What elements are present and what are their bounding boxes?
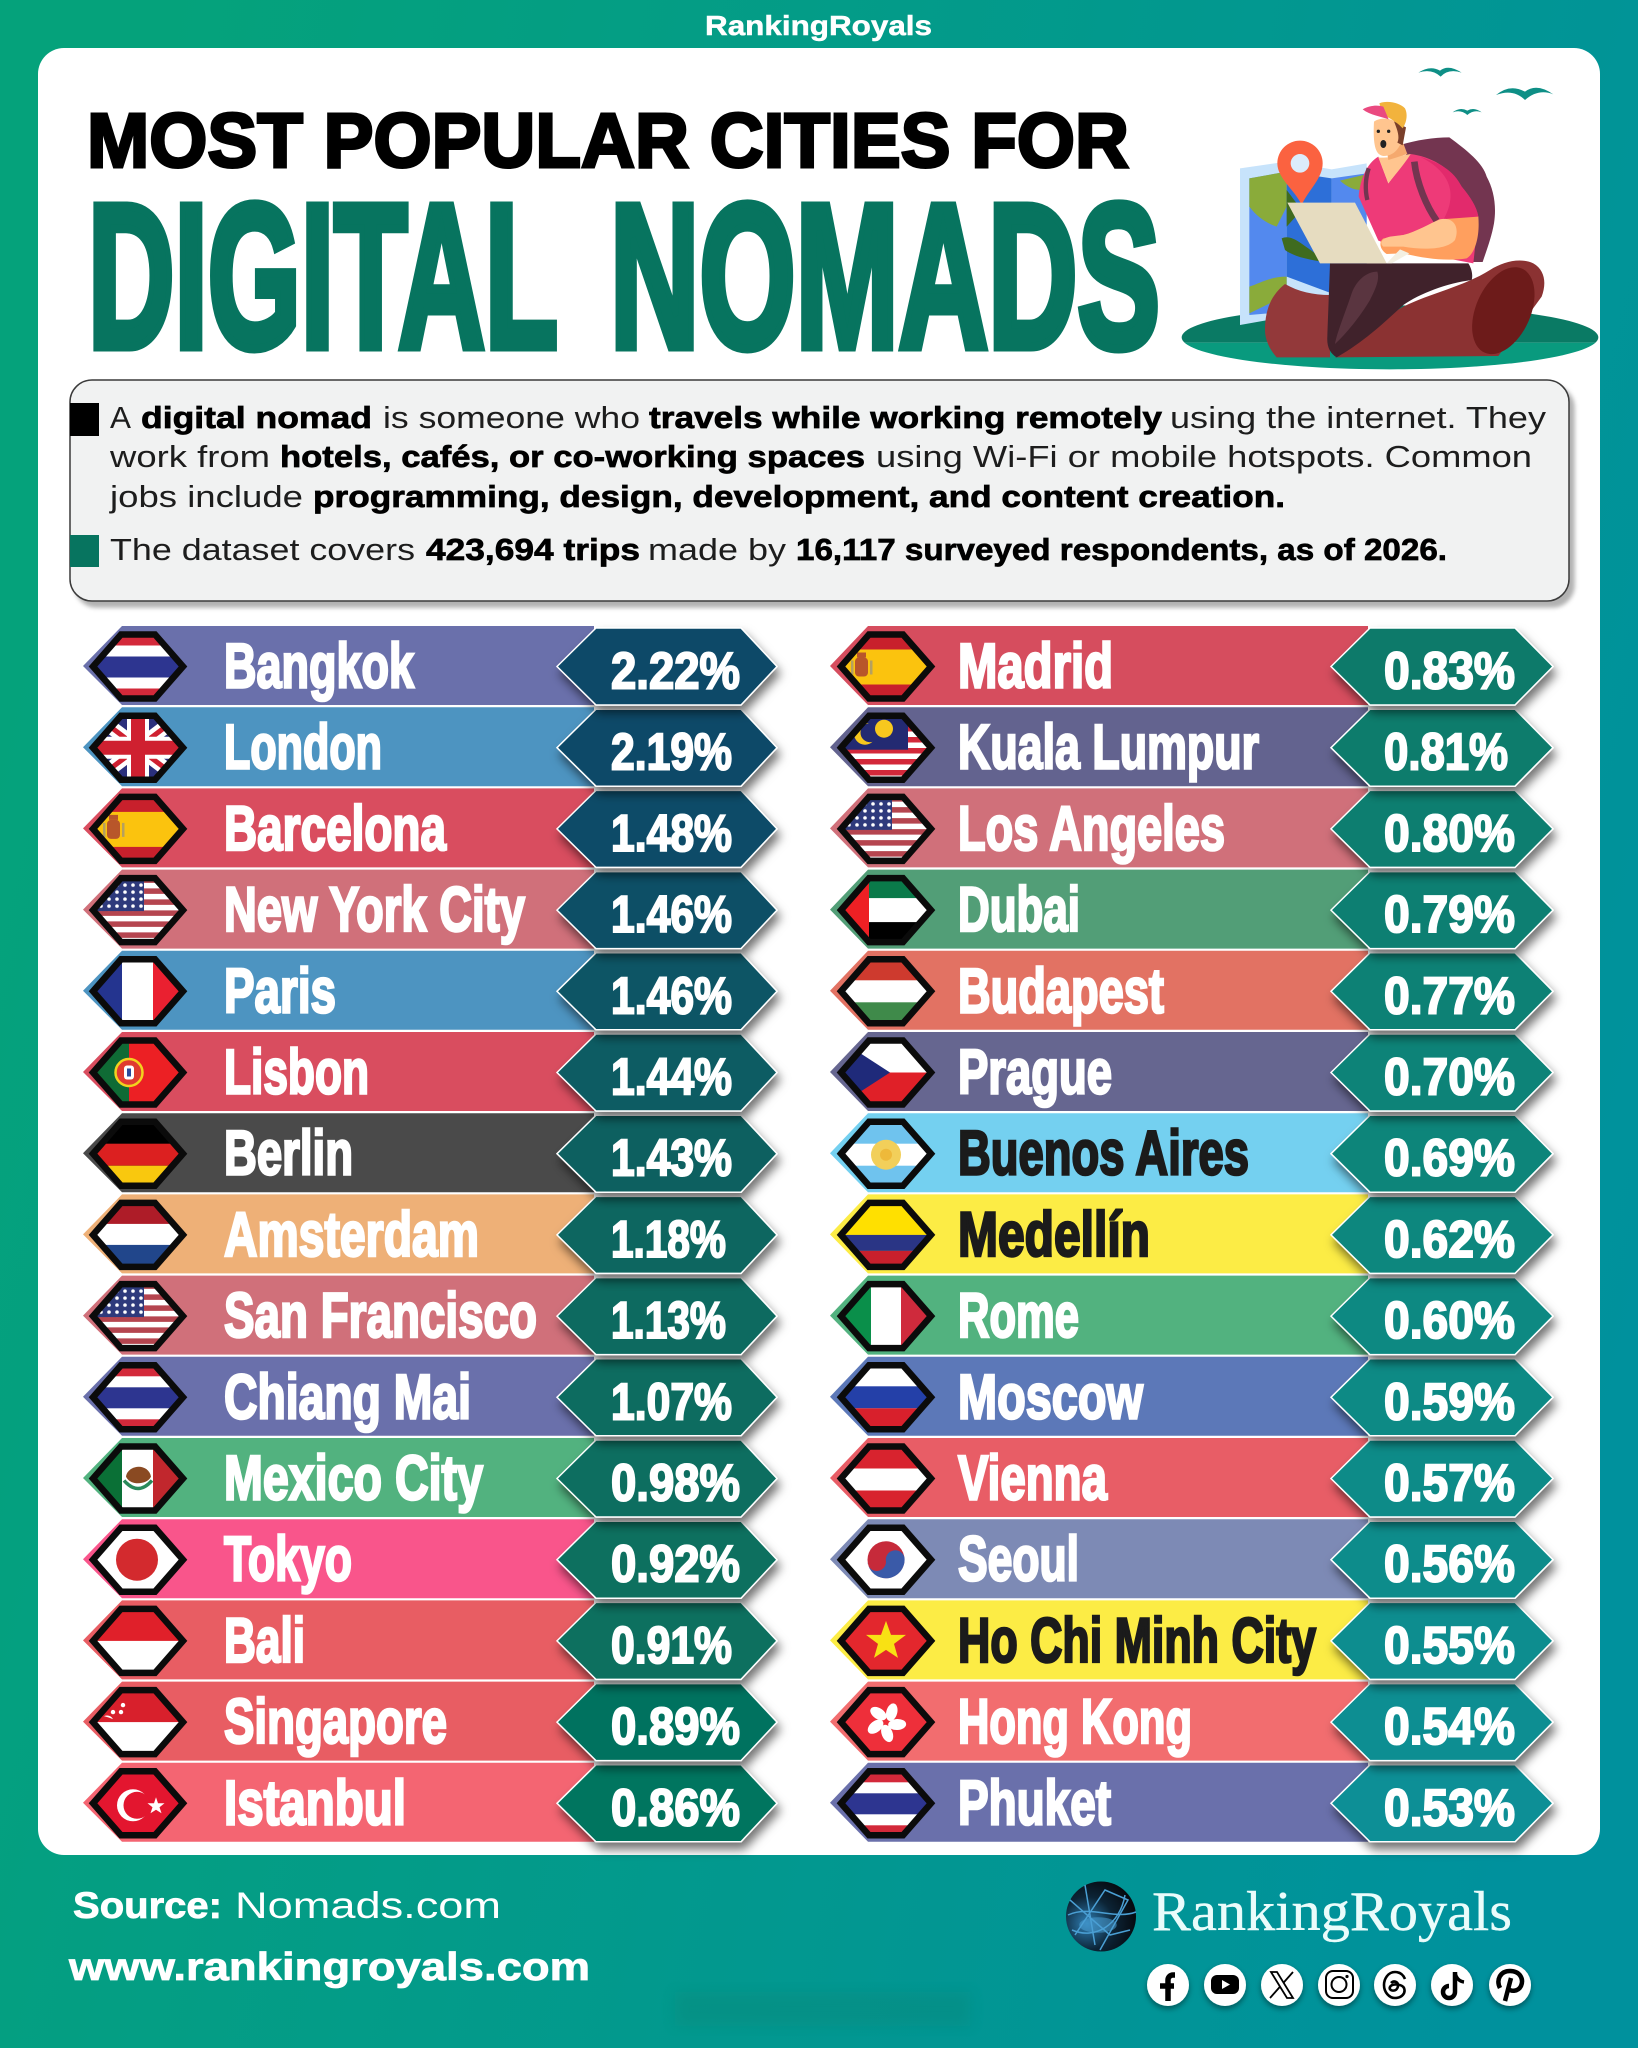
ranking row: Tokyo xyxy=(83,1519,777,1598)
ranking row: Phuket: Phuket xyxy=(958,1768,1111,1838)
ranking row: London: 2.19% xyxy=(611,724,732,782)
ranking row: Los Angeles: 0.80% xyxy=(1384,805,1515,863)
ranking row: Bali xyxy=(83,1600,777,1679)
ranking row: New York City: 1.46% xyxy=(611,886,732,944)
bullet: black xyxy=(70,403,99,436)
text: dataset note: 423,694 trips xyxy=(426,532,640,567)
ranking row: Amsterdam: 1.18% xyxy=(611,1211,726,1269)
ranking row: Madrid: 0.83% xyxy=(1384,642,1515,700)
text: dataset note: The dataset covers xyxy=(110,532,415,567)
text: definition paragraph: work from xyxy=(109,439,270,474)
title line two: NOMADS xyxy=(610,162,1160,391)
ranking row: Chiang Mai xyxy=(83,1357,777,1436)
ranking row: Seoul: 0.56% xyxy=(1384,1536,1515,1594)
ranking row: Dubai xyxy=(830,870,1553,949)
ranking row: Ho Chi Minh City: 0.55% xyxy=(1384,1617,1515,1675)
icon: map xyxy=(1240,162,1367,325)
ranking row: Kuala Lumpur: Kuala Lumpur xyxy=(958,713,1259,783)
ranking row: Madrid xyxy=(830,626,1553,705)
icon: birds xyxy=(1418,68,1553,115)
ranking row: Budapest: 0.77% xyxy=(1384,967,1515,1025)
ranking row: Bangkok xyxy=(83,626,777,705)
icon: shirt xyxy=(1359,154,1478,263)
ranking row: Los Angeles: Los Angeles xyxy=(958,794,1225,864)
ranking row: Mexico City: Mexico City xyxy=(224,1444,483,1514)
text: definition paragraph: programming, design, development, and content creation. xyxy=(313,479,1285,514)
ranking row: Moscow xyxy=(830,1357,1553,1436)
ranking row: Lisbon: Lisbon xyxy=(224,1038,369,1108)
ranking row: Phuket xyxy=(830,1763,1553,1842)
ranking row: Rome xyxy=(830,1276,1553,1355)
source line: Nomads.com xyxy=(235,1885,501,1926)
ranking row: Ho Chi Minh City: Ho Chi Minh City xyxy=(958,1606,1316,1676)
ranking row: Rome: Rome xyxy=(958,1281,1079,1351)
text: dataset note: 16,117 surveyed respondents, as of 2026. xyxy=(796,532,1447,567)
text: dataset note xyxy=(110,532,1447,567)
icon: arm xyxy=(1380,217,1479,260)
ranking row: Bangkok: Bangkok xyxy=(224,632,415,702)
ranking row: Budapest xyxy=(830,951,1553,1030)
icon: laptop xyxy=(1287,203,1409,263)
ranking row: Rome: 0.60% xyxy=(1384,1292,1515,1350)
icon: tiktok xyxy=(1431,1964,1473,2006)
ranking row: Buenos Aires: 0.69% xyxy=(1384,1130,1515,1188)
ranking row: Amsterdam xyxy=(83,1194,777,1273)
title line two: DIGITAL xyxy=(88,162,558,391)
ranking row: Lisbon xyxy=(83,1032,777,1111)
ranking row: Dubai: 0.79% xyxy=(1384,886,1515,944)
text: definition paragraph: is someone who xyxy=(383,400,640,435)
text: definition paragraph xyxy=(109,400,1547,514)
ranking row: Paris: Paris xyxy=(224,956,336,1026)
ranking row: Vienna xyxy=(830,1438,1553,1517)
ranking row: Bangkok: 2.22% xyxy=(611,642,740,700)
source line: Source: xyxy=(73,1885,222,1926)
ranking row: Vienna: Vienna xyxy=(958,1444,1108,1514)
ranking row: Medellín: 0.62% xyxy=(1384,1211,1515,1269)
social icons xyxy=(1147,1964,1531,2006)
ranking row: London xyxy=(83,707,777,786)
ranking row: Moscow: 0.59% xyxy=(1384,1373,1515,1431)
ranking row: Seoul xyxy=(830,1519,1553,1598)
ranking row: Istanbul xyxy=(83,1763,777,1842)
text: definition paragraph: using Wi-Fi or mobile hotspots. Common xyxy=(876,439,1532,474)
ranking row: San Francisco xyxy=(83,1276,777,1355)
icon: x xyxy=(1261,1964,1303,2006)
ranking row: Istanbul: 0.86% xyxy=(611,1779,740,1837)
logo: wordmark: RankingRoyals xyxy=(1152,1881,1512,1943)
icon: threads xyxy=(1374,1964,1416,2006)
ranking row: Amsterdam: Amsterdam xyxy=(224,1200,479,1270)
ranking row: Medellín xyxy=(830,1194,1553,1273)
ranking row: San Francisco: 1.13% xyxy=(611,1292,726,1350)
blurred smudge xyxy=(675,1992,970,2026)
top brand label: RankingRoyals xyxy=(705,10,932,41)
panel: definition box xyxy=(70,380,1569,601)
ranking row: Paris: 1.46% xyxy=(611,967,732,1025)
bullet: teal xyxy=(70,535,99,567)
text: definition paragraph: jobs include xyxy=(109,479,303,514)
ranking row: Seoul: Seoul xyxy=(958,1525,1079,1595)
ranking row: Vienna: 0.57% xyxy=(1384,1454,1515,1512)
ranking row: Lisbon: 1.44% xyxy=(611,1048,732,1106)
text: dataset note: made by xyxy=(648,532,787,567)
icon: head xyxy=(1363,102,1411,183)
ranking row: Prague xyxy=(830,1032,1553,1111)
ranking row: Buenos Aires: Buenos Aires xyxy=(958,1119,1249,1189)
ranking row: Barcelona: Barcelona xyxy=(224,794,447,864)
icon: youtube xyxy=(1204,1964,1246,2006)
ranking row: Kuala Lumpur: 0.81% xyxy=(1384,724,1508,782)
ranking row: San Francisco: San Francisco xyxy=(224,1281,537,1351)
ranking row: Buenos Aires xyxy=(830,1113,1553,1192)
ranking row: Prague: 0.70% xyxy=(1384,1048,1515,1106)
ranking row: Bali: Bali xyxy=(224,1606,305,1676)
icon: legs xyxy=(1327,263,1472,357)
ranking row: Berlin xyxy=(83,1113,777,1192)
illustration: traveller with laptop on a log xyxy=(1180,68,1600,373)
ranking row: New York City: New York City xyxy=(224,875,525,945)
ranking row: Chiang Mai: 1.07% xyxy=(611,1373,732,1431)
ranking row: Dubai: Dubai xyxy=(958,875,1080,945)
text: definition paragraph: digital nomad xyxy=(141,400,372,435)
ranking row: Kuala Lumpur xyxy=(830,707,1553,786)
icon: instagram xyxy=(1318,1964,1360,2006)
ranking row: Los Angeles xyxy=(830,788,1553,867)
title xyxy=(87,98,1160,391)
icon: ground xyxy=(1182,305,1598,370)
website url: www.rankingroyals.com xyxy=(68,1946,590,1989)
ranking row: Barcelona xyxy=(83,788,777,867)
text: definition paragraph: using the internet. They xyxy=(1170,400,1547,435)
ranking row: New York City xyxy=(83,870,777,949)
ranking row: Bali: 0.91% xyxy=(611,1617,732,1675)
ranking row: Phuket: 0.53% xyxy=(1384,1779,1515,1837)
ranking row: Barcelona: 1.48% xyxy=(611,805,732,863)
icon: location pin xyxy=(1277,141,1323,205)
logo: globe xyxy=(1066,1882,1136,1952)
ranking row: Istanbul: Istanbul xyxy=(224,1768,406,1838)
text: definition paragraph: travels while working remotely xyxy=(649,400,1163,435)
ranking row: Hong Kong xyxy=(830,1682,1553,1761)
text: definition paragraph: hotels, cafés, or co-working spaces xyxy=(280,439,865,474)
ranking row: Tokyo: Tokyo xyxy=(224,1525,352,1595)
ranking row: Medellín: Medellín xyxy=(958,1200,1150,1270)
ranking row: Hong Kong: Hong Kong xyxy=(958,1687,1192,1757)
ranking row: Chiang Mai: Chiang Mai xyxy=(224,1362,471,1432)
ranking row: Hong Kong: 0.54% xyxy=(1384,1698,1515,1756)
icon: backpack xyxy=(1400,137,1495,262)
ranking row: Moscow: Moscow xyxy=(958,1362,1144,1432)
ranking row: Ho Chi Minh City xyxy=(830,1600,1553,1679)
source line xyxy=(73,1885,501,1926)
icon: facebook xyxy=(1147,1964,1189,2006)
title line one: MOST POPULAR CITIES FOR xyxy=(87,98,1129,184)
ranking row: Tokyo: 0.92% xyxy=(611,1536,740,1594)
ranking row: Madrid: Madrid xyxy=(958,632,1113,702)
ranking row: Budapest: Budapest xyxy=(958,956,1164,1026)
ranking row: Mexico City xyxy=(83,1438,777,1517)
ranking row: Singapore xyxy=(83,1682,777,1761)
ranking row: Singapore: Singapore xyxy=(224,1687,447,1757)
ranking row: Prague: Prague xyxy=(958,1038,1112,1108)
ranking row: London: London xyxy=(224,713,382,783)
ranking row: Berlin: Berlin xyxy=(224,1119,353,1189)
icon: pinterest xyxy=(1489,1964,1531,2006)
icon: log xyxy=(1265,258,1547,364)
text: definition paragraph: A xyxy=(110,400,131,435)
ranking row: Paris xyxy=(83,951,777,1030)
ranking row: Berlin: 1.43% xyxy=(611,1130,732,1188)
ranking row: Mexico City: 0.98% xyxy=(611,1454,740,1512)
ranking row: Singapore: 0.89% xyxy=(611,1698,740,1756)
